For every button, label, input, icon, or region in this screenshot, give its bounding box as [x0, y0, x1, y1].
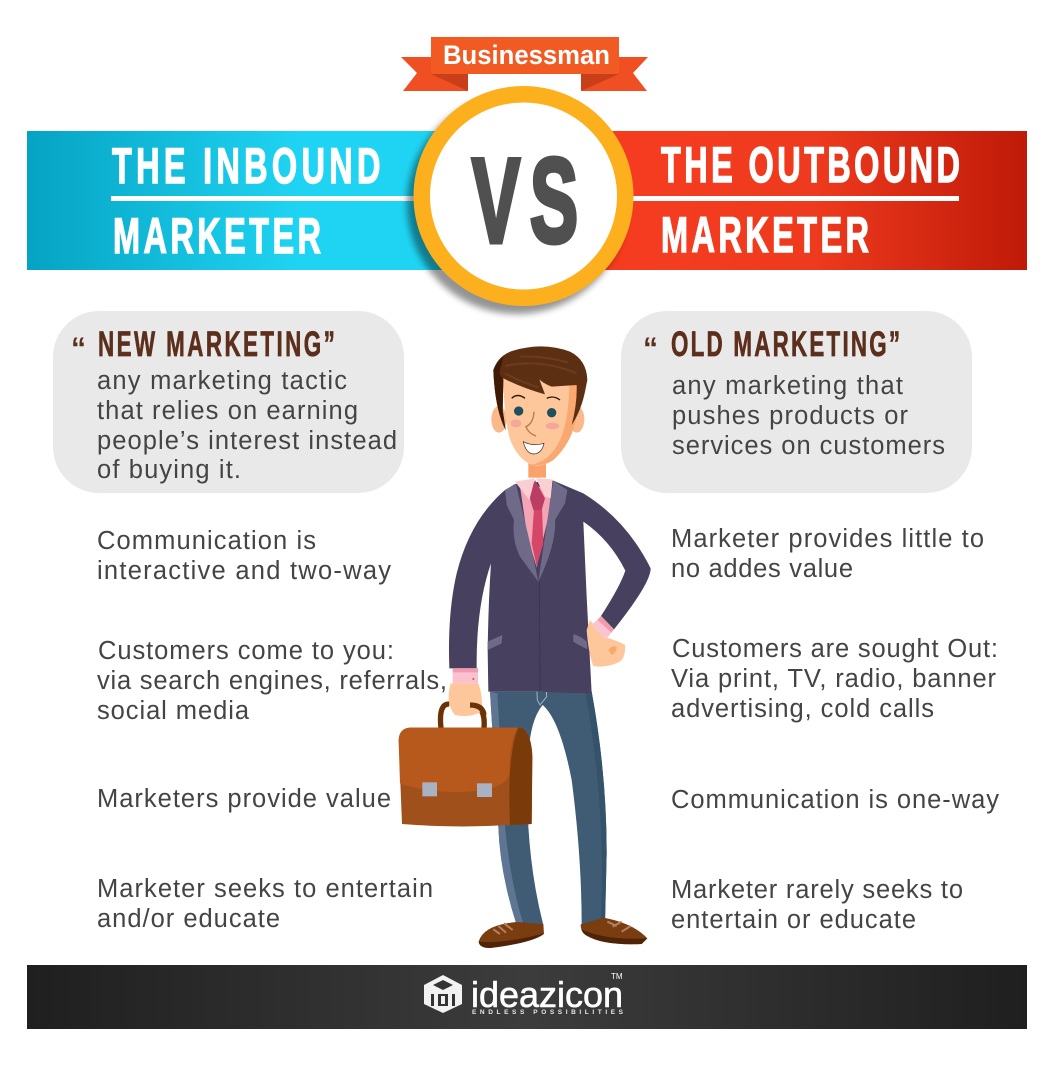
definition: new marketing: that relies on earning — [97, 397, 358, 425]
outbound points — [671, 525, 999, 934]
heading: the inbound marketer: THE INBOUND — [112, 138, 380, 194]
legs and shoes — [479, 683, 647, 948]
panel: old marketing — [621, 311, 972, 493]
outbound point: customers: advertising, cold calls — [671, 695, 934, 723]
heading: the inbound marketer — [111, 138, 421, 264]
ribbon: businessman: Businessman — [443, 40, 610, 70]
inbound point: communication: Communication is — [97, 527, 316, 555]
outbound point: value: Marketer provides little to — [671, 525, 984, 553]
subheading: new marketing: “ — [71, 332, 86, 365]
businessman illustration — [399, 346, 651, 948]
definition: new marketing: any marketing tactic — [97, 367, 347, 395]
outbound point: entertain: entertain or educate — [671, 906, 916, 934]
inbound point: customers: social media — [97, 697, 250, 725]
right header banner — [600, 131, 1027, 270]
inbound point: communication: interactive and two-way — [97, 557, 391, 585]
subheading: new marketing: NEW MARKETING” — [98, 325, 335, 364]
ribbon: businessman — [401, 37, 648, 91]
heading: the outbound marketer: THE OUTBOUND — [661, 137, 960, 193]
icon: ideazicon logo — [424, 975, 462, 1013]
definition: old marketing: pushes products or — [672, 402, 908, 430]
inbound point: customers — [97, 637, 447, 725]
vs badge: V — [472, 133, 520, 267]
footer bar — [27, 965, 1027, 1029]
inbound point: customers: Customers come to you: — [98, 637, 394, 665]
outbound point: entertain — [671, 876, 963, 934]
heading: the outbound marketer — [630, 137, 960, 263]
outbound point: value: no addes value — [671, 555, 853, 583]
inbound point: customers: via search engines, referrals, — [97, 667, 447, 695]
definition: old marketing: services on customers — [672, 432, 945, 460]
head — [491, 346, 587, 478]
outbound point: customers — [671, 635, 998, 723]
logo wordmark: TM — [611, 972, 623, 981]
panel: new marketing — [53, 311, 404, 493]
definition: new marketing: of buying it. — [97, 456, 241, 484]
inbound point: entertain — [97, 875, 433, 933]
definition: old marketing: any marketing that — [672, 372, 903, 400]
logo wordmark: ENDLESS POSSIBILITIES — [472, 1009, 624, 1016]
definition: old marketing — [672, 372, 945, 460]
inbound point: value: Marketers provide value — [97, 785, 391, 813]
subheading: old marketing: “ — [643, 332, 658, 365]
outbound point: entertain: Marketer rarely seeks to — [671, 876, 963, 904]
definition: new marketing — [97, 367, 397, 484]
inbound point: communication — [97, 527, 391, 585]
jacket — [449, 478, 651, 693]
heading: the inbound marketer: MARKETER — [113, 208, 321, 264]
logo wordmark: ideazicon — [471, 974, 623, 1015]
outbound point: communication: Communication is one-way — [671, 786, 999, 814]
inbound points — [97, 527, 447, 933]
outbound point: customers: Customers are sought Out: — [672, 635, 998, 663]
right hand — [587, 616, 625, 667]
vs badge — [407, 86, 634, 314]
briefcase and left hand — [399, 668, 532, 826]
heading: the outbound marketer: MARKETER — [661, 207, 869, 263]
inbound point: entertain: and/or educate — [97, 905, 280, 933]
outbound point: value — [671, 525, 984, 583]
outbound point: customers: Via print, TV, radio, banner — [671, 665, 996, 693]
inbound point: entertain: Marketer seeks to entertain — [97, 875, 433, 903]
left header banner — [27, 131, 447, 270]
subheading: old marketing: OLD MARKETING” — [671, 325, 900, 364]
vs badge: S — [530, 133, 578, 267]
definition: new marketing: people’s interest instead — [97, 427, 397, 455]
